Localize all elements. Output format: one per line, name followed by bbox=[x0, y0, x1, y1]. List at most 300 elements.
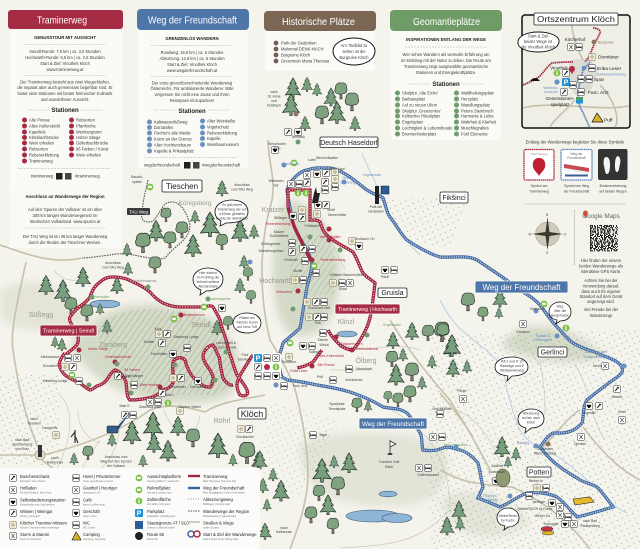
label: Weg der Freundschaft south: Weg der Freundschaft bbox=[362, 421, 424, 428]
map annotations: Bale E. bbox=[120, 404, 131, 408]
town: Klöch: Klöch bbox=[241, 409, 263, 419]
map annotations: Weg Auf den Spuren bbox=[100, 460, 132, 464]
callout: Burgruine Klöch bbox=[333, 38, 375, 65]
pine trees bbox=[39, 77, 521, 539]
numbered waypoints bbox=[76, 112, 626, 498]
map annotations: Klinkbachurt bbox=[41, 355, 59, 359]
label: Weg der Freundschaft south bbox=[359, 418, 427, 429]
panel: Traminerweg: Klöcklachbrücke bbox=[29, 135, 60, 140]
map annotations: Altes Kellerstöckl bbox=[318, 354, 344, 358]
callout: Kräuterweg: Es gibt einen bbox=[222, 203, 242, 207]
panel: Geomantieplätze: Leichtigkeit & Lebensfreude bbox=[402, 126, 453, 130]
legend column 3: Route 66 bbox=[147, 537, 158, 541]
legend column 3: Staatsgrenze AT / SLO bbox=[147, 520, 190, 526]
panel: Weg der Freundschaft: Abkürzung: 12,9 km | ca. 5 Stunden bbox=[159, 56, 225, 61]
map annotations: Gölterbachbrücke bbox=[105, 355, 131, 359]
legend column 4: Start & Ziel der Wanderwege bbox=[203, 532, 257, 537]
panel: Historische Plätze: Park der Gedenken bbox=[281, 40, 317, 46]
panel: Geomantieplätze: Traminerweg zeigt ausgewählte geomantische bbox=[404, 64, 489, 69]
legend column 3: Aussichtsplattform bbox=[147, 474, 182, 479]
panel: Weg der Freundschaft: www.wegderfreundschaft.at bbox=[167, 68, 218, 73]
legend column 2: WC | toilet bbox=[83, 526, 95, 530]
callout: Kunst: Rätsel am bbox=[239, 316, 255, 320]
panel: Traminerweg: Rebsorten bbox=[29, 146, 49, 152]
map annotations: Anschluss bbox=[105, 261, 121, 265]
callout: Kräuterweg: a 60min gehalten bbox=[219, 212, 245, 216]
callout: Radwege: Radwege und E bbox=[500, 364, 525, 368]
map annotations: Gruchipplatz bbox=[432, 407, 452, 411]
text: GPS info: interaktive GPS Karte. bbox=[581, 269, 621, 274]
town: Potten: Potten bbox=[529, 470, 549, 476]
legend column 3 bbox=[135, 474, 190, 541]
legend column 2: Camping bbox=[83, 532, 100, 537]
map annotations: Weinberg Lodge bbox=[43, 379, 68, 383]
hills and terrain shading bbox=[0, 195, 640, 549]
map annotations: Weber A. bbox=[529, 479, 543, 483]
map annotations: Domittner bbox=[282, 360, 297, 364]
legend column 4: Abkürzungsweg bbox=[203, 497, 233, 502]
map annotations: Wilfinger 59 bbox=[274, 216, 292, 220]
legend column 1: Wissen | Weingut bbox=[20, 509, 53, 514]
panel: Historische Plätze: Burgruine Klöch bbox=[281, 52, 311, 58]
label: TAU Weg bbox=[127, 208, 150, 215]
panel: Traminerweg: die separat aber auch gemeinsam begehbar sind. Er bbox=[17, 85, 113, 90]
compass bbox=[528, 213, 567, 255]
map annotations: Bauakt- bbox=[131, 175, 143, 179]
legend column 1: Klöcher Traminer wine knowledge bbox=[20, 526, 59, 530]
map annotations: nach Bad bbox=[583, 519, 597, 523]
QR code bbox=[590, 226, 618, 251]
map annotations: Bale L. bbox=[165, 393, 175, 397]
town: Deutsch Haseldorf: Deutsch Haseldorf bbox=[320, 140, 378, 147]
map annotations: Vogrinčič bbox=[582, 411, 596, 415]
map annotations: hof bbox=[274, 184, 278, 188]
inset map: Ortszentrum Klöch: spielplatz bbox=[551, 102, 570, 107]
Klöch centre icon cluster bbox=[253, 353, 281, 379]
legend column 4: Rad Jergeljägerin | trail of friendship bbox=[203, 490, 245, 494]
map annotations: Halbenrain bbox=[47, 460, 63, 464]
label: TAU Weg: TAU Weg bbox=[129, 210, 149, 214]
legend column 2: bistro | coffee shop bbox=[83, 502, 105, 506]
panel: Weg der Freundschaft: Weinbaumuseum bbox=[207, 142, 239, 147]
town: Potten bbox=[527, 467, 551, 477]
map annotations: Schustler bbox=[43, 364, 58, 368]
callout: Kräuterweg bbox=[215, 200, 249, 226]
map annotations: Vogelschutz bbox=[281, 162, 299, 166]
map annotations: Puff bbox=[317, 375, 323, 379]
place names: Königsberg bbox=[179, 200, 212, 207]
map annotations: Streit bbox=[618, 410, 626, 414]
map annotations: nach Bad bbox=[15, 438, 29, 442]
legend column 3: parkplätze | parking spot bbox=[147, 514, 175, 518]
map annotations: Stockbauer bbox=[488, 470, 506, 474]
map annotations: Bale K. bbox=[121, 375, 132, 379]
compass: W bbox=[528, 232, 532, 236]
map annotations: Wernhofstatter bbox=[316, 156, 339, 160]
place names: Süßegg bbox=[29, 312, 53, 319]
panel: Traminerweg: Start & Ziel: Vinothek Klöch bbox=[40, 61, 91, 66]
text: GPS info: Verwendung darauf, bbox=[583, 284, 619, 288]
map annotations: Urbanbach bbox=[356, 367, 372, 371]
panel: Geomantieplätze: Fünf Elemente bbox=[461, 132, 488, 136]
place names: Ölberg bbox=[355, 357, 377, 365]
panel: Traminerweg: Gölterbachbrücke bbox=[76, 140, 109, 146]
map annotations: Wicka bbox=[319, 343, 329, 347]
panel: Historische Plätze: Grenzstein Maria Theresia bbox=[281, 58, 330, 64]
panel: Traminerweg: und wunderbarer Aussicht. bbox=[41, 97, 89, 102]
callout: start and finish: Start & Ziel bbox=[528, 34, 548, 38]
legend column 4: Radwanderer | regional trails bbox=[203, 514, 237, 518]
map annotations: Golfrestaurant bbox=[417, 473, 439, 477]
map annotations: nach bbox=[51, 456, 59, 460]
panel: legend bbox=[0, 468, 260, 549]
map annotations: Wunderorgelbau bbox=[258, 249, 284, 253]
callout: Bergstrasse bbox=[549, 302, 571, 324]
panel: Traminerweg: Altes Kellerstöckl bbox=[29, 124, 60, 128]
symbol: Bodenmarkierung bbox=[598, 149, 628, 180]
map annotations: Fischer's bbox=[483, 494, 497, 498]
map annotations: Rebsorten bbox=[276, 290, 292, 294]
map annotations: Tarnbäck bbox=[291, 135, 305, 139]
map annotations: zum TAU Weg bbox=[231, 188, 253, 192]
text: GPS info: Achten Sie bei der bbox=[584, 278, 618, 283]
map annotations: Wein erhalten bbox=[140, 383, 161, 387]
map annotations: Tagel bbox=[319, 433, 327, 437]
callout: Kräuterweg: mußte der Weinkeller bbox=[216, 216, 249, 220]
panel: Geomantieplätze: im Einklang mit der Natur zu leben. Die Route am bbox=[401, 58, 492, 63]
map annotations: SteirerREICH by Fuchs bbox=[517, 507, 553, 511]
dark dashed regional hiking trail bbox=[82, 180, 190, 259]
callout: Bergstrasse: Bergstrasse bbox=[551, 314, 569, 318]
place names bbox=[29, 200, 377, 425]
panel: Weg der Freundschaft: Vogelschutz bbox=[207, 124, 229, 130]
legend column 1: winery | vineyard bbox=[20, 514, 40, 518]
place names: Zaraberg bbox=[99, 342, 127, 349]
town: Gerlinci bbox=[538, 347, 567, 357]
legend column 2: Geschäft bbox=[83, 509, 101, 514]
place names: Seindl bbox=[191, 322, 211, 329]
map annotations: Muller bbox=[293, 269, 303, 273]
legend column 4: Rad Traminer | Traminer trail bbox=[203, 479, 236, 483]
panel: Traminerweg: Weinbergturm bbox=[76, 130, 102, 134]
panel: Traminerweg: 96 Farben / Kunst bbox=[76, 146, 109, 152]
inset map: Ortszentrum Klöch: Burgruine bbox=[598, 40, 614, 44]
legend column 4: Traminerweg bbox=[203, 474, 228, 479]
callout: Kräuterweg: Kräuterweg der auf bbox=[218, 208, 246, 212]
map annotations: Kapelle & bbox=[536, 334, 551, 338]
inset map: Ortszentrum Klöch bbox=[518, 13, 630, 128]
legend column 3: Grenze | national border bbox=[147, 526, 175, 530]
map annotations: Vronbacher bbox=[345, 378, 364, 382]
route: Traminerweg bbox=[59, 190, 375, 400]
compass: O bbox=[564, 232, 567, 236]
legend column 3: Parkplatz bbox=[147, 509, 164, 514]
map annotations: St. Anna bbox=[268, 94, 281, 98]
callout: Kunst: auf Lena Tuff bbox=[237, 325, 257, 329]
panel: Traminerweg: Der Traminerweg besteht aus zwei Wegschleifen, bbox=[20, 80, 110, 84]
panel: Traminerweg: Seindl-Runde: 7,9 km | ca. 3,0 Stunden bbox=[29, 49, 101, 54]
panel: Anschluss an Wanderwege der Region: Der TAU Weg ist ein 36 km langer Wanderweg bbox=[23, 234, 108, 239]
legend column 4: Straßen & Wege bbox=[203, 520, 235, 526]
legend column 3: Zahlenfläche bbox=[147, 497, 172, 502]
map annotations: Weinbach bbox=[268, 179, 284, 183]
POI icons bbox=[53, 129, 625, 527]
panel: Traminerweg: Wein erhalten bbox=[29, 140, 55, 146]
panel: Traminerweg: GENUSSTOUR MIT AUSSICHT bbox=[34, 35, 96, 40]
legend column 4: start & finish of the hiking trails bbox=[203, 537, 239, 541]
map annotations: Mahnmal bbox=[530, 307, 544, 311]
ponds bbox=[90, 300, 412, 522]
label: Weg der Freundschaft north bbox=[475, 281, 568, 293]
text: GPS info: dass auch Ihr eigener bbox=[581, 289, 621, 294]
legend column 2: Café bbox=[83, 498, 93, 502]
map annotations: Muschlegrabes bbox=[444, 443, 468, 447]
route labels bbox=[40, 208, 568, 429]
map annotations: Kind bbox=[274, 146, 281, 150]
map annotations: Pfister bbox=[457, 389, 468, 393]
symbol: Weg der Freundschaft: Freundschaft bbox=[567, 156, 586, 160]
map annotations: und Graz bbox=[15, 447, 29, 451]
town: Tieschen: Tieschen bbox=[166, 182, 198, 191]
compass: N bbox=[546, 213, 549, 217]
map annotations: Kuhl bbox=[155, 327, 162, 331]
legend column 1: Sturm & chestnuts bbox=[20, 537, 42, 541]
legend column 1: Ab-Hof-Verkauf | farm shop bbox=[20, 490, 52, 494]
map annotations: der Vulkane bbox=[107, 464, 125, 468]
panel: Traminerweg: Alte Presse bbox=[29, 118, 51, 122]
callout: Radwege: Weitwanderweg bbox=[500, 368, 524, 372]
map annotations: Mraslic bbox=[612, 395, 623, 399]
label: Traminerweg Hochwarth bbox=[335, 304, 400, 314]
map annotations: Djordan bbox=[574, 442, 586, 446]
panel: Geomantieplätze: Stationen bbox=[432, 82, 460, 88]
legend column 1: Buschenschank bbox=[20, 474, 50, 479]
text: GPS info: Standort auf dem Gerät bbox=[580, 294, 623, 299]
legend column 1: Selbstbedienung | self service bbox=[20, 502, 55, 506]
map annotations: Fischhölter bbox=[151, 352, 168, 356]
panel: Weg der Freundschaft: vergessen Sie nicht eine Jause und Ihren bbox=[154, 92, 230, 97]
text: GPS info bbox=[579, 258, 623, 318]
map annotations: Dorotrafen bbox=[190, 385, 206, 389]
map annotations: Wandersorten bbox=[341, 342, 363, 346]
legend column 2: WC bbox=[83, 520, 90, 526]
roads bbox=[0, 140, 640, 549]
callout: Burgruine Klöch: Am Titelbild zu bbox=[341, 43, 367, 48]
symbol: Traminerweg: Traminerweg bbox=[530, 152, 548, 156]
compass: S bbox=[546, 251, 549, 255]
Google Maps heading: Google Maps bbox=[582, 213, 620, 220]
inset map: Ortszentrum Klöch: Generationen- bbox=[546, 96, 575, 101]
map annotations: Barnsteinkapelle bbox=[205, 297, 231, 301]
panel: Weg der Freundschaft: Start & Ziel: Vinothek Klöch bbox=[167, 62, 218, 67]
panel: Traminerweg: #traminerweg bbox=[75, 174, 101, 178]
map annotations: Gasthof bbox=[491, 464, 503, 468]
map annotations: Feldbach bbox=[267, 104, 281, 108]
panel: Weg der Freundschaft: Der erste grenzüberschreitende Wanderweg bbox=[152, 80, 233, 86]
label: Traminerweg Hochwarth: Traminerweg | Hochwarth bbox=[338, 307, 397, 313]
place names: Kratzer bbox=[262, 207, 285, 214]
inset map: Ortszentrum Klöch: Erika Leser bbox=[597, 66, 622, 72]
callout: Abkürzung: Abkürzung bbox=[523, 412, 539, 416]
legend column 2: Hotel | Privatzimmer bbox=[83, 474, 121, 479]
panel: Weg der Freundschaft: Dorotrafen bbox=[154, 125, 174, 130]
panel: Traminerweg: Holzer Stiege bbox=[76, 135, 101, 140]
panel: Weg der Freundschaft: Österreichs. Für ambitionierte Wanderer. Bitte bbox=[150, 86, 234, 91]
legend column 1: Selbstbedienungsstation bbox=[20, 498, 66, 502]
panel: Historische Plätze bbox=[264, 11, 376, 71]
label: Traminerweg Seindl bbox=[40, 325, 97, 336]
panel: Traminerweg: Stationen bbox=[51, 108, 79, 114]
town: Deutsch Haseldorf bbox=[320, 137, 378, 148]
map annotations: Großauer Ch. bbox=[355, 237, 375, 241]
map annotations: Großbuch-Heil bbox=[308, 306, 330, 310]
legend column 2: Gasthof | Heuriger bbox=[83, 486, 118, 490]
map annotations: Klinzl bbox=[339, 287, 347, 291]
map annotations: Kunfler bbox=[144, 340, 155, 344]
panel: Weg der Freundschaft: Stationen bbox=[178, 109, 206, 115]
map annotations: Vogelschutz bbox=[363, 173, 381, 177]
map annotations: Prikastplatz bbox=[534, 338, 552, 342]
map annotations bbox=[12, 90, 626, 534]
map annotations: Wein erhalten bbox=[320, 235, 341, 239]
map annotations: Reben- bbox=[342, 176, 354, 180]
town: Gruisla bbox=[378, 288, 407, 298]
text: GPS info: angezeigt wird. bbox=[587, 299, 615, 304]
map annotations: Frühbarth bbox=[305, 224, 319, 228]
panel: Traminerweg: bietet viele Stationen mit bester heimischer Kulinarik bbox=[18, 91, 113, 96]
map annotations: Rebenerklebung bbox=[321, 258, 346, 262]
town: Fikšinci bbox=[440, 192, 468, 203]
map annotations: Rebenerklebung bbox=[266, 222, 291, 226]
legend column 3: rest area | photo spot bbox=[147, 490, 172, 494]
panel: Symbole: Traminerweg bbox=[529, 190, 549, 194]
map annotations: Leichtigkeit & bbox=[216, 341, 237, 345]
map annotations: nach bbox=[270, 90, 278, 94]
panel: Historische Plätze: Historische Plätze bbox=[282, 16, 355, 28]
map annotations: Fam. Arzt bbox=[293, 384, 307, 388]
map annotations: 96 Farben bbox=[124, 368, 140, 372]
map annotations: Traminer Golf bbox=[379, 460, 399, 464]
map annotations: und bbox=[271, 99, 277, 103]
panel: Geomantieplätze: Skulptur ‚Alte Eiche' bbox=[402, 90, 438, 96]
inset map: Ortszentrum Klöch: Spar bbox=[594, 77, 605, 83]
callout: Abkürzung: zurück nach bbox=[522, 416, 540, 420]
legend column 1 bbox=[10, 474, 68, 541]
map annotations: Klöcktacher bbox=[236, 435, 255, 439]
map annotations: Steinhänger bbox=[125, 374, 144, 378]
panel: Traminerweg: Kapellele bbox=[29, 130, 47, 134]
legend column 4: Bildlingen | shorter path bbox=[203, 502, 231, 506]
legend column 4: Weg der Freundschaft bbox=[203, 486, 245, 490]
panel: Anschluss an Wanderwege der Region: Steirischen Vulkanland. www.spuren.at bbox=[30, 219, 101, 224]
map annotations: Fünf bbox=[242, 353, 248, 357]
deciduous trees bbox=[65, 83, 488, 534]
map annotations: Beringer bbox=[533, 500, 546, 504]
callout: SteirerReich: SteirerReich bbox=[499, 514, 517, 518]
callout: Burgruine Klöch: sehen ist die bbox=[342, 49, 366, 54]
map annotations: spielle bbox=[132, 180, 142, 184]
legend column 3: info table | info-point bbox=[147, 502, 171, 506]
panel: Geomantieplätze: Peters Steinbruch bbox=[461, 108, 494, 114]
panel: Geomantieplätze: Engelsplatz bbox=[402, 120, 423, 124]
map annotations: Kastanienbaum bbox=[584, 355, 608, 359]
map annotations: Garnison bbox=[516, 330, 530, 334]
panel: Traminerweg bbox=[8, 10, 123, 190]
panel: Traminerweg: Hochwarth-Runde: 6,5 km | ca. 2,5 Stunden bbox=[25, 55, 106, 60]
legend column 2: camping | Camping bbox=[83, 537, 106, 541]
map annotations: Anschluss bbox=[234, 183, 250, 187]
panel: Symbole: Entlang der Wanderwege begleiten Sie diese Symbole bbox=[526, 140, 625, 144]
map annotations: Bärnbachbrunn bbox=[181, 313, 205, 317]
legend column 1: Sturm & Maroni bbox=[20, 532, 49, 537]
panel: Weg der Freundschaft: Kunst an der Grenze bbox=[154, 136, 192, 142]
callout: Kuhschelle: im Frühling die bbox=[197, 276, 219, 280]
map annotations: Salinger bbox=[309, 350, 322, 354]
callout: SteirerReich bbox=[497, 508, 519, 530]
map annotations: Engelsplatz bbox=[383, 323, 401, 327]
panel: Geomantieplätze: Skulptur ‚Grenzenlos' bbox=[402, 108, 441, 114]
panel: Geomantieplätze: Stationen und Energiekraftplätze. bbox=[416, 70, 476, 75]
callout: Kunst: Klöcher Kunst bbox=[236, 320, 258, 324]
callout: Kuhschelle: Hier wächst bbox=[199, 271, 217, 275]
callout: Radwege bbox=[495, 357, 528, 381]
map annotations: Waldheimatplatz bbox=[132, 279, 157, 283]
map annotations: Gölstner Bauernhöfes bbox=[330, 273, 363, 277]
map annotations: Lafer bbox=[308, 158, 317, 162]
inset map: Ortszentrum Klöch: P bbox=[564, 80, 569, 86]
map annotations: Steinberg Lodge bbox=[174, 335, 199, 339]
map annotations: alte Weide bbox=[482, 498, 498, 502]
panel: Symbole: Bodenmarkierung bbox=[600, 184, 626, 188]
map annotations: Tieschen bbox=[27, 422, 41, 426]
legend column 4: roads & paths bbox=[203, 526, 220, 530]
panel: Traminerweg: www.traminerweg.at bbox=[47, 67, 84, 72]
map annotations: Radweg bbox=[517, 441, 529, 445]
text: GPS info: Wanderung! bbox=[590, 313, 612, 318]
panel: Geomantieplätze: Wer sehen Wandern als wertvolle Erfahrung um bbox=[403, 52, 490, 57]
legend column 3: viewing platform | viewpoint bbox=[147, 479, 179, 483]
panel: Weg der Freundschaft: GRENZENLOS WANDERN bbox=[165, 36, 219, 41]
map annotations: Mörtl bbox=[327, 208, 335, 212]
route: Weg der Freundschaft bbox=[278, 168, 622, 517]
panel: Weg der Freundschaft bbox=[137, 9, 249, 168]
map annotations: Park der bbox=[370, 205, 383, 209]
legend column 1: Heuriger | wine tavern bbox=[20, 479, 46, 483]
callout: Burgruine Klöch: Burgruine Klöch bbox=[339, 55, 369, 60]
panel: Weg der Freundschaft: Rundweg: 16,9 km | ca. 6 Stunden bbox=[161, 50, 224, 55]
map annotations: Klöch bbox=[385, 465, 393, 469]
panel: Historische Plätze: Mahnmal DENK MACH bbox=[281, 46, 324, 52]
town: Fikšinci: Fikšinci bbox=[442, 195, 466, 202]
map annotations: Topfoggel bbox=[544, 522, 559, 526]
panel: Geomantieplätze: Keltischer Ritualplatz bbox=[402, 114, 440, 118]
legend column 4 bbox=[188, 474, 257, 541]
panel: Symbole: auf beiden Wegen bbox=[599, 190, 627, 194]
inset map: Ortszentrum Klöch: Puff bbox=[604, 118, 613, 124]
map annotations: Schuselster bbox=[168, 385, 187, 389]
callout: SteirerReich: by Fuchs bbox=[501, 518, 515, 522]
text: GPS info: Viel Freude bei der bbox=[584, 307, 619, 312]
callout: Abkürzung bbox=[518, 409, 544, 433]
monument, golf flag and landmark icons bbox=[38, 186, 594, 535]
panel: Symbole: Symbol am bbox=[531, 184, 548, 188]
panel: Weg der Freundschaft: Rebenerklebung bbox=[207, 130, 238, 136]
map annotations: Weinhaldbrunn bbox=[356, 347, 378, 351]
panel: Traminerweg: Pfarrkirche bbox=[76, 124, 97, 128]
map annotations: Gedenken bbox=[368, 210, 384, 214]
place names: Hochwarth bbox=[259, 278, 293, 285]
map annotations: Roll bbox=[315, 321, 321, 325]
